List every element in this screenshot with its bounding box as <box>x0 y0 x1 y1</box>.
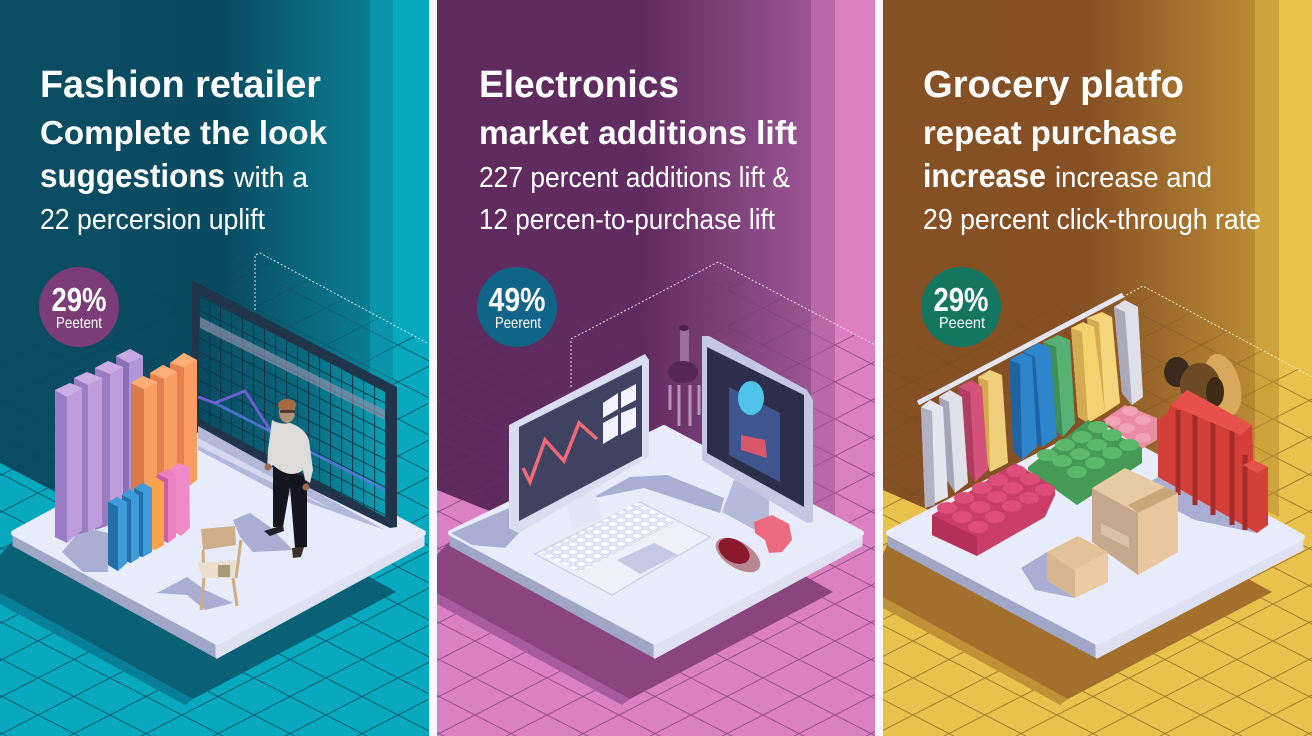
red bars shadow <box>1137 477 1257 533</box>
heading text: market additions lift <box>479 114 797 151</box>
person shadow <box>233 513 293 552</box>
heading text: 22 percersion uplift <box>40 204 265 236</box>
left monitor <box>509 354 649 533</box>
heading text <box>40 64 328 236</box>
faint wall grid <box>254 262 393 385</box>
chair <box>197 526 241 610</box>
floor <box>0 0 429 736</box>
platform <box>14 423 423 657</box>
back wall <box>437 0 811 530</box>
floor grid <box>883 358 1312 736</box>
heading text: 227 percent additions lift & <box>479 162 790 194</box>
percent badge <box>477 267 557 347</box>
percent badge: Peetent <box>56 315 102 332</box>
back wall <box>883 0 1255 530</box>
panel: fashion retailer <box>0 0 429 736</box>
floor grid <box>0 326 429 736</box>
heading text: increase <box>923 157 1046 194</box>
floor <box>437 0 875 736</box>
heading text: 29 percent click-through rate <box>923 204 1261 236</box>
platform <box>451 428 861 657</box>
percent badge <box>39 267 119 347</box>
chair shadow <box>157 577 233 610</box>
platform shadow <box>883 540 1272 705</box>
wall strip <box>370 0 393 384</box>
trend line <box>523 423 597 482</box>
heading text: Fashion retailer <box>40 64 321 106</box>
floor grid <box>437 325 875 736</box>
glass tube ornament <box>668 325 699 426</box>
computer mouse <box>716 538 760 572</box>
purple bars <box>55 349 143 543</box>
clothes rail <box>918 295 1123 403</box>
orange bars <box>131 353 197 490</box>
wall strip <box>811 0 835 517</box>
percent badge <box>921 267 1001 347</box>
box shadows <box>1021 552 1075 598</box>
panel: grocery platform <box>883 0 1312 736</box>
person <box>264 399 313 558</box>
back wall <box>0 0 370 515</box>
pink brick <box>1103 405 1157 450</box>
percent badge: 29% <box>934 281 988 318</box>
faint wall grid <box>883 286 1279 530</box>
heading text: with a <box>233 162 309 194</box>
hanging garments <box>921 300 1143 508</box>
wall screen <box>192 280 397 528</box>
platform <box>889 425 1302 657</box>
keyboard <box>535 502 710 595</box>
percent badge: Peerent <box>495 315 541 332</box>
short colour bars <box>108 463 190 571</box>
heading text: Electronics <box>479 64 679 106</box>
percent badge: Peeent <box>939 315 985 332</box>
bar shadows <box>62 527 108 572</box>
heading text: repeat purchase <box>923 114 1177 151</box>
percent badge: 49% <box>488 281 546 318</box>
heading text: Grocery platfo <box>923 64 1184 106</box>
right monitor <box>702 336 813 530</box>
crimson brick <box>932 463 1055 556</box>
platform shadow <box>0 540 396 705</box>
dotted outline <box>255 253 429 344</box>
panel: electronics <box>437 0 875 736</box>
screen shadow band <box>198 426 385 530</box>
dotted outline <box>1123 286 1312 377</box>
heading text <box>479 64 797 236</box>
large cardboard box <box>1092 468 1178 575</box>
heading text: suggestions <box>40 157 225 194</box>
window tiles <box>603 384 636 444</box>
heading text: 12 percen-to-purchase lift <box>479 204 775 236</box>
heading text: Complete the look <box>40 114 328 151</box>
faint wall grid <box>746 278 835 504</box>
small cardboard box <box>1047 536 1108 598</box>
heading text: increase and <box>1055 162 1212 194</box>
heading text <box>923 64 1261 236</box>
floor <box>883 0 1312 736</box>
food item <box>1164 350 1248 420</box>
green brick <box>1028 420 1142 505</box>
percent badge: 29% <box>52 281 106 318</box>
monitor shadows <box>451 475 724 548</box>
red accessory <box>754 515 792 553</box>
platform shadow <box>437 540 833 705</box>
dotted outline <box>571 262 875 387</box>
wall strip <box>1255 0 1279 517</box>
red bars <box>1158 390 1268 533</box>
